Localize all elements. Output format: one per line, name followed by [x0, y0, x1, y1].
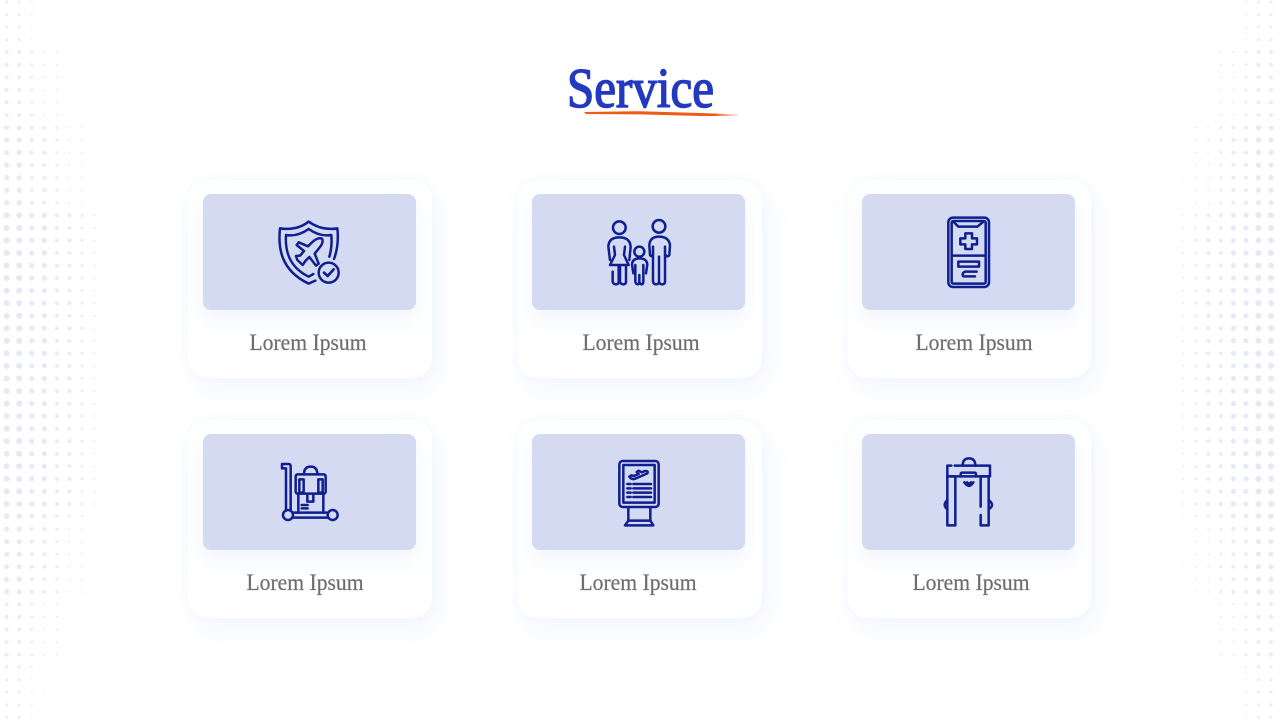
- image panel: [203, 434, 416, 550]
- icon: family: [607, 218, 672, 286]
- card: flight information board: [518, 420, 762, 618]
- icon: phone with medical cross: [947, 216, 990, 288]
- label: Lorem Ipsum: [579, 570, 697, 595]
- card: flight insurance: [188, 180, 432, 378]
- label: Lorem Ipsum: [249, 330, 367, 355]
- card: security gate: [848, 420, 1091, 618]
- card: family: [518, 180, 762, 378]
- label: Lorem Ipsum: [246, 570, 364, 595]
- icon: shield with plane: [278, 220, 340, 285]
- image panel: [862, 434, 1075, 550]
- image panel: [532, 194, 745, 310]
- label: Lorem Ipsum: [915, 330, 1033, 355]
- image panel: [862, 194, 1075, 310]
- card: luggage trolley: [188, 420, 432, 618]
- label: Lorem Ipsum: [912, 570, 1030, 595]
- card: medical app: [848, 180, 1091, 378]
- icon: flight information kiosk: [618, 460, 660, 527]
- label: Lorem Ipsum: [582, 330, 700, 355]
- icon: metal detector gate: [943, 457, 994, 527]
- title: Service: [567, 58, 714, 120]
- image panel: [203, 194, 416, 310]
- icon: luggage trolley: [280, 462, 339, 522]
- image panel: [532, 434, 745, 550]
- title underline brush stroke: [584, 111, 738, 116]
